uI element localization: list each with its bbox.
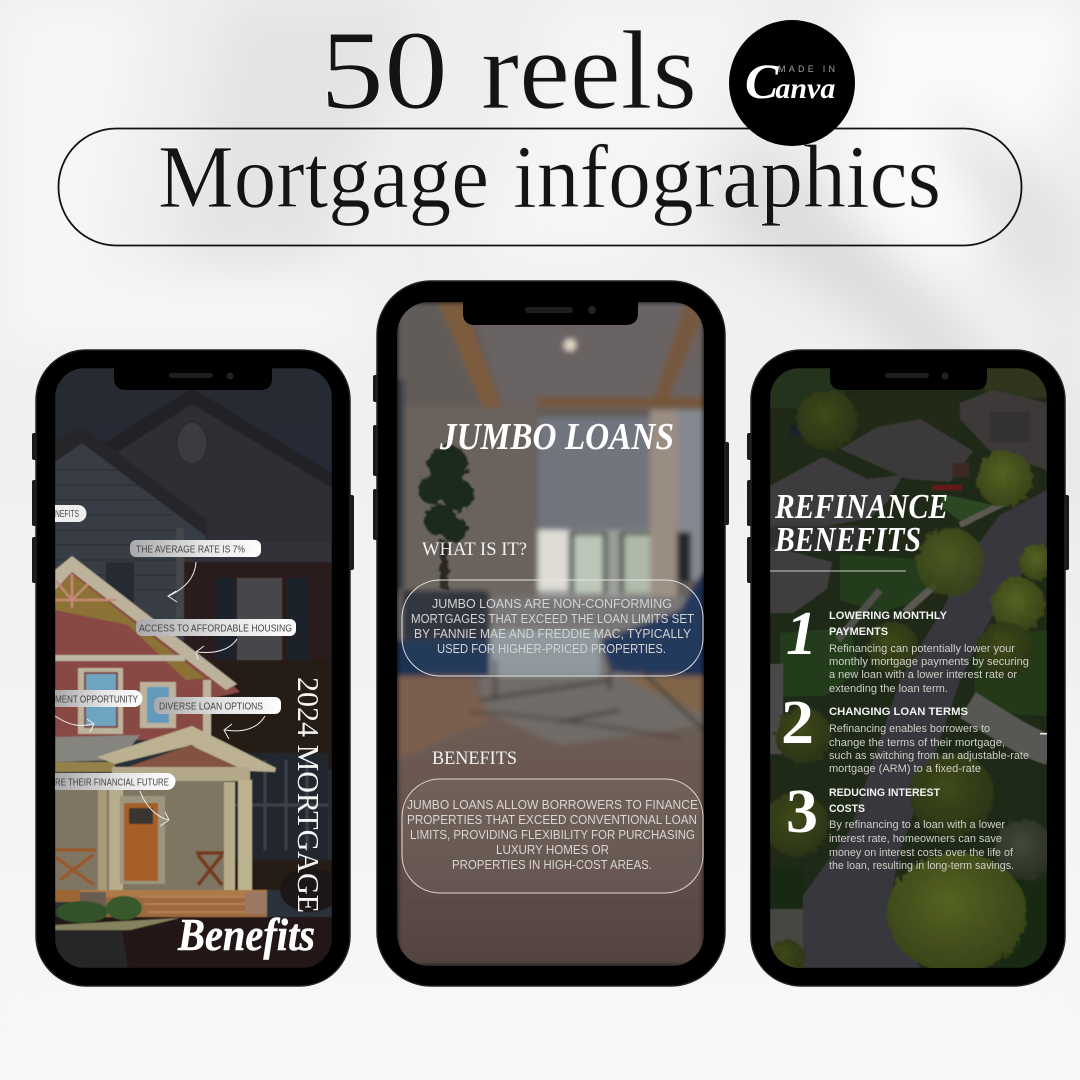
label pill: benefits: NEFITS (55, 508, 79, 520)
label pill: affordable housing: ACCESS TO AFFORDABLE HOUSING (139, 622, 292, 634)
text box: what is it (402, 580, 703, 676)
arrow: opportunity (55, 716, 94, 732)
label pill: diverse loan options: DIVERSE LOAN OPTIONS (159, 700, 263, 712)
text box: benefits: PROPERTIES IN HIGH-COST AREAS. (452, 858, 652, 872)
item 3: reducing interest costs (786, 778, 1014, 872)
text box: what is it: MORTGAGES THAT EXCEED THE LOAN LIMITS SET (411, 612, 694, 626)
text box: benefits (402, 779, 703, 893)
label pill: investment opportunity: MENT OPPORTUNITY (55, 694, 138, 706)
item 3: reducing interest costs: interest rate, homeowners can save (829, 833, 1002, 845)
arrow: financial future (140, 791, 169, 826)
item 1: lowering monthly payments: a new loan with a lower interest rate or (829, 669, 1017, 681)
label pill: financial future (55, 773, 176, 790)
title: 50 reels: reels (481, 9, 697, 133)
item 1: lowering monthly payments: monthly mortgage payments by securing (829, 656, 1029, 668)
item 2: changing loan terms: Refinancing enables borrowers to (829, 723, 990, 735)
phone side buttons (32, 433, 354, 583)
badge: made in Canva: Canva (745, 53, 835, 109)
item 1: lowering monthly payments: 1 (786, 600, 817, 668)
heading: what is it: WHAT IS IT? (422, 539, 527, 560)
phone body (36, 350, 350, 986)
item 3: reducing interest costs: REDUCING INTEREST (829, 787, 940, 799)
text box: benefits: PROPERTIES THAT EXCEED CONVENTIONAL LOAN (407, 813, 697, 827)
text box: benefits: LIMITS, PROVIDING FLEXIBILITY FOR PURCHASING (410, 828, 695, 842)
phone side buttons (373, 375, 729, 540)
heading: REFINANCE BENEFITS: REFINANCE (774, 487, 948, 526)
title: 50 reels (320, 9, 697, 133)
notch with speaker and camera (463, 301, 638, 325)
item 2: changing loan terms (781, 689, 1029, 775)
text box: benefits: LUXURY HOMES OR (496, 843, 609, 857)
item 1: lowering monthly payments: LOWERING MONTHLY (829, 610, 948, 622)
item 2: changing loan terms: change the terms of their mortgage, (829, 737, 1005, 749)
title: 50 reels: 50 (320, 9, 448, 133)
text box: what is it: JUMBO LOANS ARE NON-CONFORMING (432, 597, 672, 611)
item 3: reducing interest costs: the loan, resulting in long-term savings. (829, 860, 1014, 872)
label pill: benefits (55, 505, 86, 522)
title: Mortgage infographics (158, 128, 941, 227)
heading: JUMBO LOANS: JUMBO LOANS (439, 416, 674, 458)
notch with speaker and camera (114, 367, 272, 390)
heading: benefits: BENEFITS (432, 748, 517, 769)
label pill: affordable housing (136, 619, 296, 636)
rounded title frame (58, 128, 1022, 246)
divider line (770, 570, 906, 572)
item 1: lowering monthly payments (786, 600, 1029, 695)
title: Mortgage infographics: Mortgage (158, 128, 489, 227)
item 1: lowering monthly payments: PAYMENTS (829, 626, 888, 638)
text box: what is it: BY FANNIE MAE AND FREDDIE MAC, TYPICALLY (414, 627, 692, 641)
item 2: changing loan terms: such as switching from an adjustable-rate (829, 750, 1029, 762)
item 1: lowering monthly payments: extending the loan term. (829, 683, 948, 695)
phone side buttons (747, 433, 1069, 583)
arrow: rate (168, 562, 196, 602)
badge: made in Canva (729, 20, 855, 146)
text box: benefits: JUMBO LOANS ALLOW BORROWERS TO FINANCE (407, 798, 698, 812)
badge: made in Canva: MADE IN (778, 64, 835, 74)
photo: blurred interior (397, 302, 704, 966)
label pill: investment opportunity (55, 690, 142, 707)
photo: aerial neighbourhood (765, 368, 1055, 976)
text box: what is it: USED FOR HIGHER-PRICED PROPERTIES. (437, 642, 666, 656)
title: Mortgage infographics: infographics (513, 128, 941, 227)
item 3: reducing interest costs: COSTS (829, 803, 865, 815)
item 3: reducing interest costs: 3 (786, 778, 818, 846)
label pill: financial future: RE THEIR FINANCIAL FUTURE (55, 776, 169, 788)
item 2: changing loan terms: CHANGING LOAN TERMS (829, 706, 968, 718)
arrow: housing (196, 639, 237, 660)
phone: refinance benefits (747, 350, 1069, 986)
label pill: the average rate: THE AVERAGE RATE IS 7% (136, 544, 245, 556)
heading: 2024 mortgage vertical: 2024 MORTGAGE (291, 677, 326, 913)
label pill: diverse loan options (154, 697, 281, 714)
item 1: lowering monthly payments: Refinancing can potentially lower your (829, 643, 1015, 655)
item 3: reducing interest costs: money on interest costs over the life of (829, 847, 1014, 859)
item 3: reducing interest costs: By refinancing to a loan with a lower (829, 819, 1005, 831)
phone body (751, 350, 1065, 986)
heading: REFINANCE BENEFITS: BENEFITS (774, 520, 921, 559)
label pill: the average rate (130, 540, 261, 557)
phone: mortgage benefits (32, 350, 354, 986)
phone body (377, 281, 725, 986)
photo: house exterior (55, 368, 340, 968)
phone: jumbo loans (373, 281, 729, 986)
item 2: changing loan terms: 2 (781, 689, 814, 757)
small edge dash (1040, 733, 1047, 734)
notch with speaker and camera (830, 367, 987, 390)
item 2: changing loan terms: mortgage (ARM) to a fixed-rate (829, 763, 981, 775)
arrow: loan options (224, 716, 265, 739)
heading: REFINANCE BENEFITS (774, 487, 948, 559)
heading: Benefits: Benefits (177, 909, 315, 960)
